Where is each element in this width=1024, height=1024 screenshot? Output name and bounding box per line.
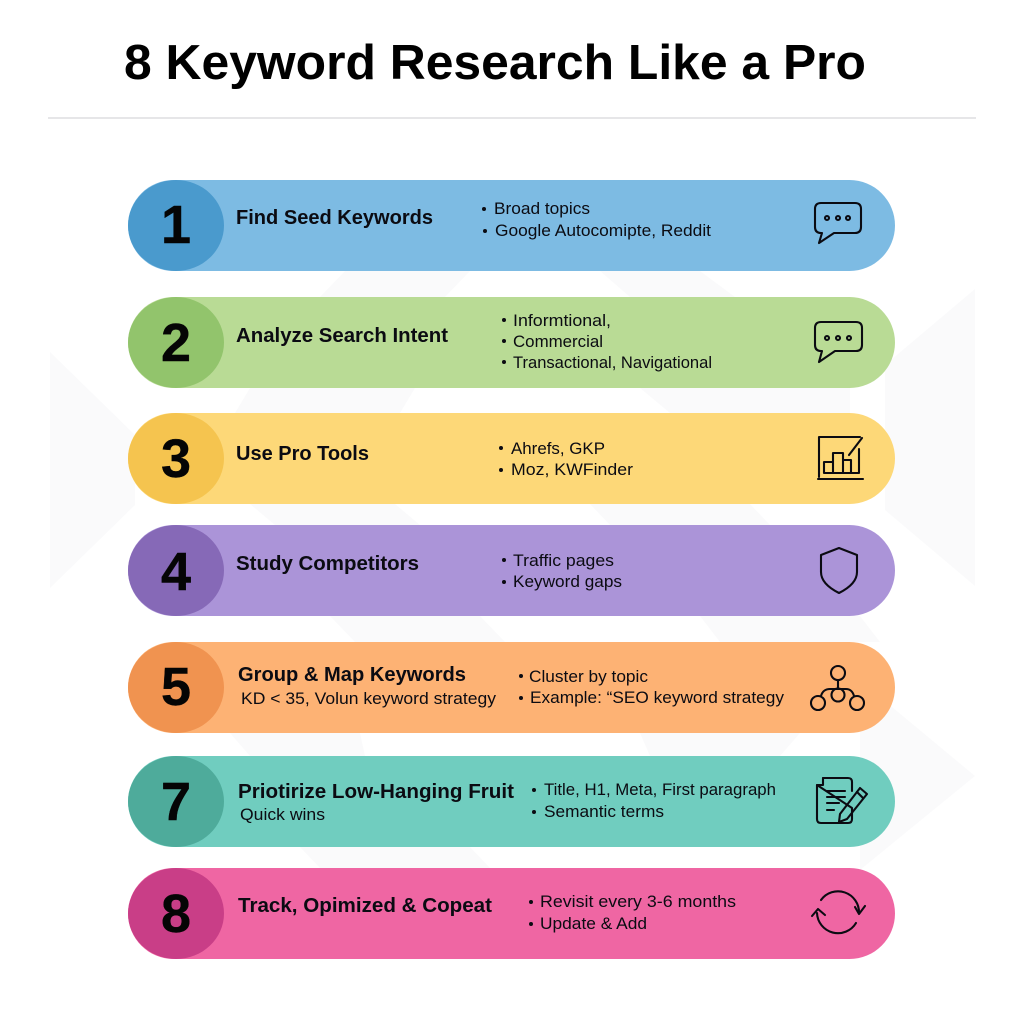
panel: step 4: Study Competitors [236, 552, 419, 575]
background watermark chevrons [50, 271, 975, 870]
panel: step 5 [128, 642, 895, 733]
panel: step 7: Quick wins [240, 806, 325, 824]
icon: network nodes [811, 666, 864, 710]
panel: step 3: Ahrefs, GKP [511, 440, 605, 458]
panel: step 2: Analyze Search Intent [236, 324, 448, 347]
icon: document with pencil [817, 778, 867, 823]
panel: step 3 [128, 413, 895, 504]
panel: step 7 [128, 756, 895, 847]
panel: step 1: 1 [161, 195, 191, 255]
panel: step 7: Title, H1, Meta, First paragraph [544, 781, 776, 799]
panel: step 3: 3 [161, 429, 191, 489]
panel: step 5: Cluster by topic [529, 668, 648, 686]
panel: step 7: Priotirize Low-Hanging Fruit [238, 780, 514, 803]
panel: step 2 [128, 297, 895, 388]
panel: step 4: Keyword gaps [513, 573, 622, 591]
panel: step 8 [128, 868, 895, 959]
panel: step 5: KD < 35, Volun keyword strategy [241, 690, 497, 708]
panel: step 5: Group & Map Keywords [238, 663, 466, 686]
icon: speech bubble [815, 322, 862, 362]
panel: step 1: Find Seed Keywords [236, 206, 433, 229]
panel: step 8: Revisit every 3-6 months [540, 893, 736, 911]
icon: refresh arrows [812, 891, 865, 933]
panel: step 1: Broad topics [494, 200, 590, 218]
panel: step 7: 7 [161, 772, 191, 832]
panel: step 7: Semantic terms [544, 803, 664, 821]
panel: step 4: 4 [161, 542, 191, 602]
icon: shield [821, 548, 857, 593]
panel: step 1 [128, 180, 895, 271]
panel: step 1: Google Autocomipte, Reddit [495, 222, 711, 240]
panel: step 4: Traffic pages [513, 552, 614, 570]
panel: step 3: Moz, KWFinder [511, 461, 634, 479]
panel: step 8: Update & Add [540, 915, 647, 933]
panel: step 8: 8 [161, 884, 191, 944]
icon: bar chart [818, 437, 863, 479]
panel: step 8: Track, Opimized & Copeat [238, 894, 492, 917]
panel: step 2: Transactional, Navigational [513, 354, 712, 372]
title: 8 Keyword Research Like a Pro [124, 36, 866, 90]
panel: step 2: 2 [161, 313, 191, 373]
panel: step 5: Example: “SEO keyword strategy [530, 689, 785, 707]
icon: speech bubble [815, 203, 861, 243]
panel: step 5: 5 [161, 657, 191, 717]
panel: step 4 [128, 525, 895, 616]
panel: step 2: Commercial [513, 333, 603, 351]
panel: step 3: Use Pro Tools [236, 442, 369, 465]
panel: step 2: Informtional, [513, 312, 611, 330]
